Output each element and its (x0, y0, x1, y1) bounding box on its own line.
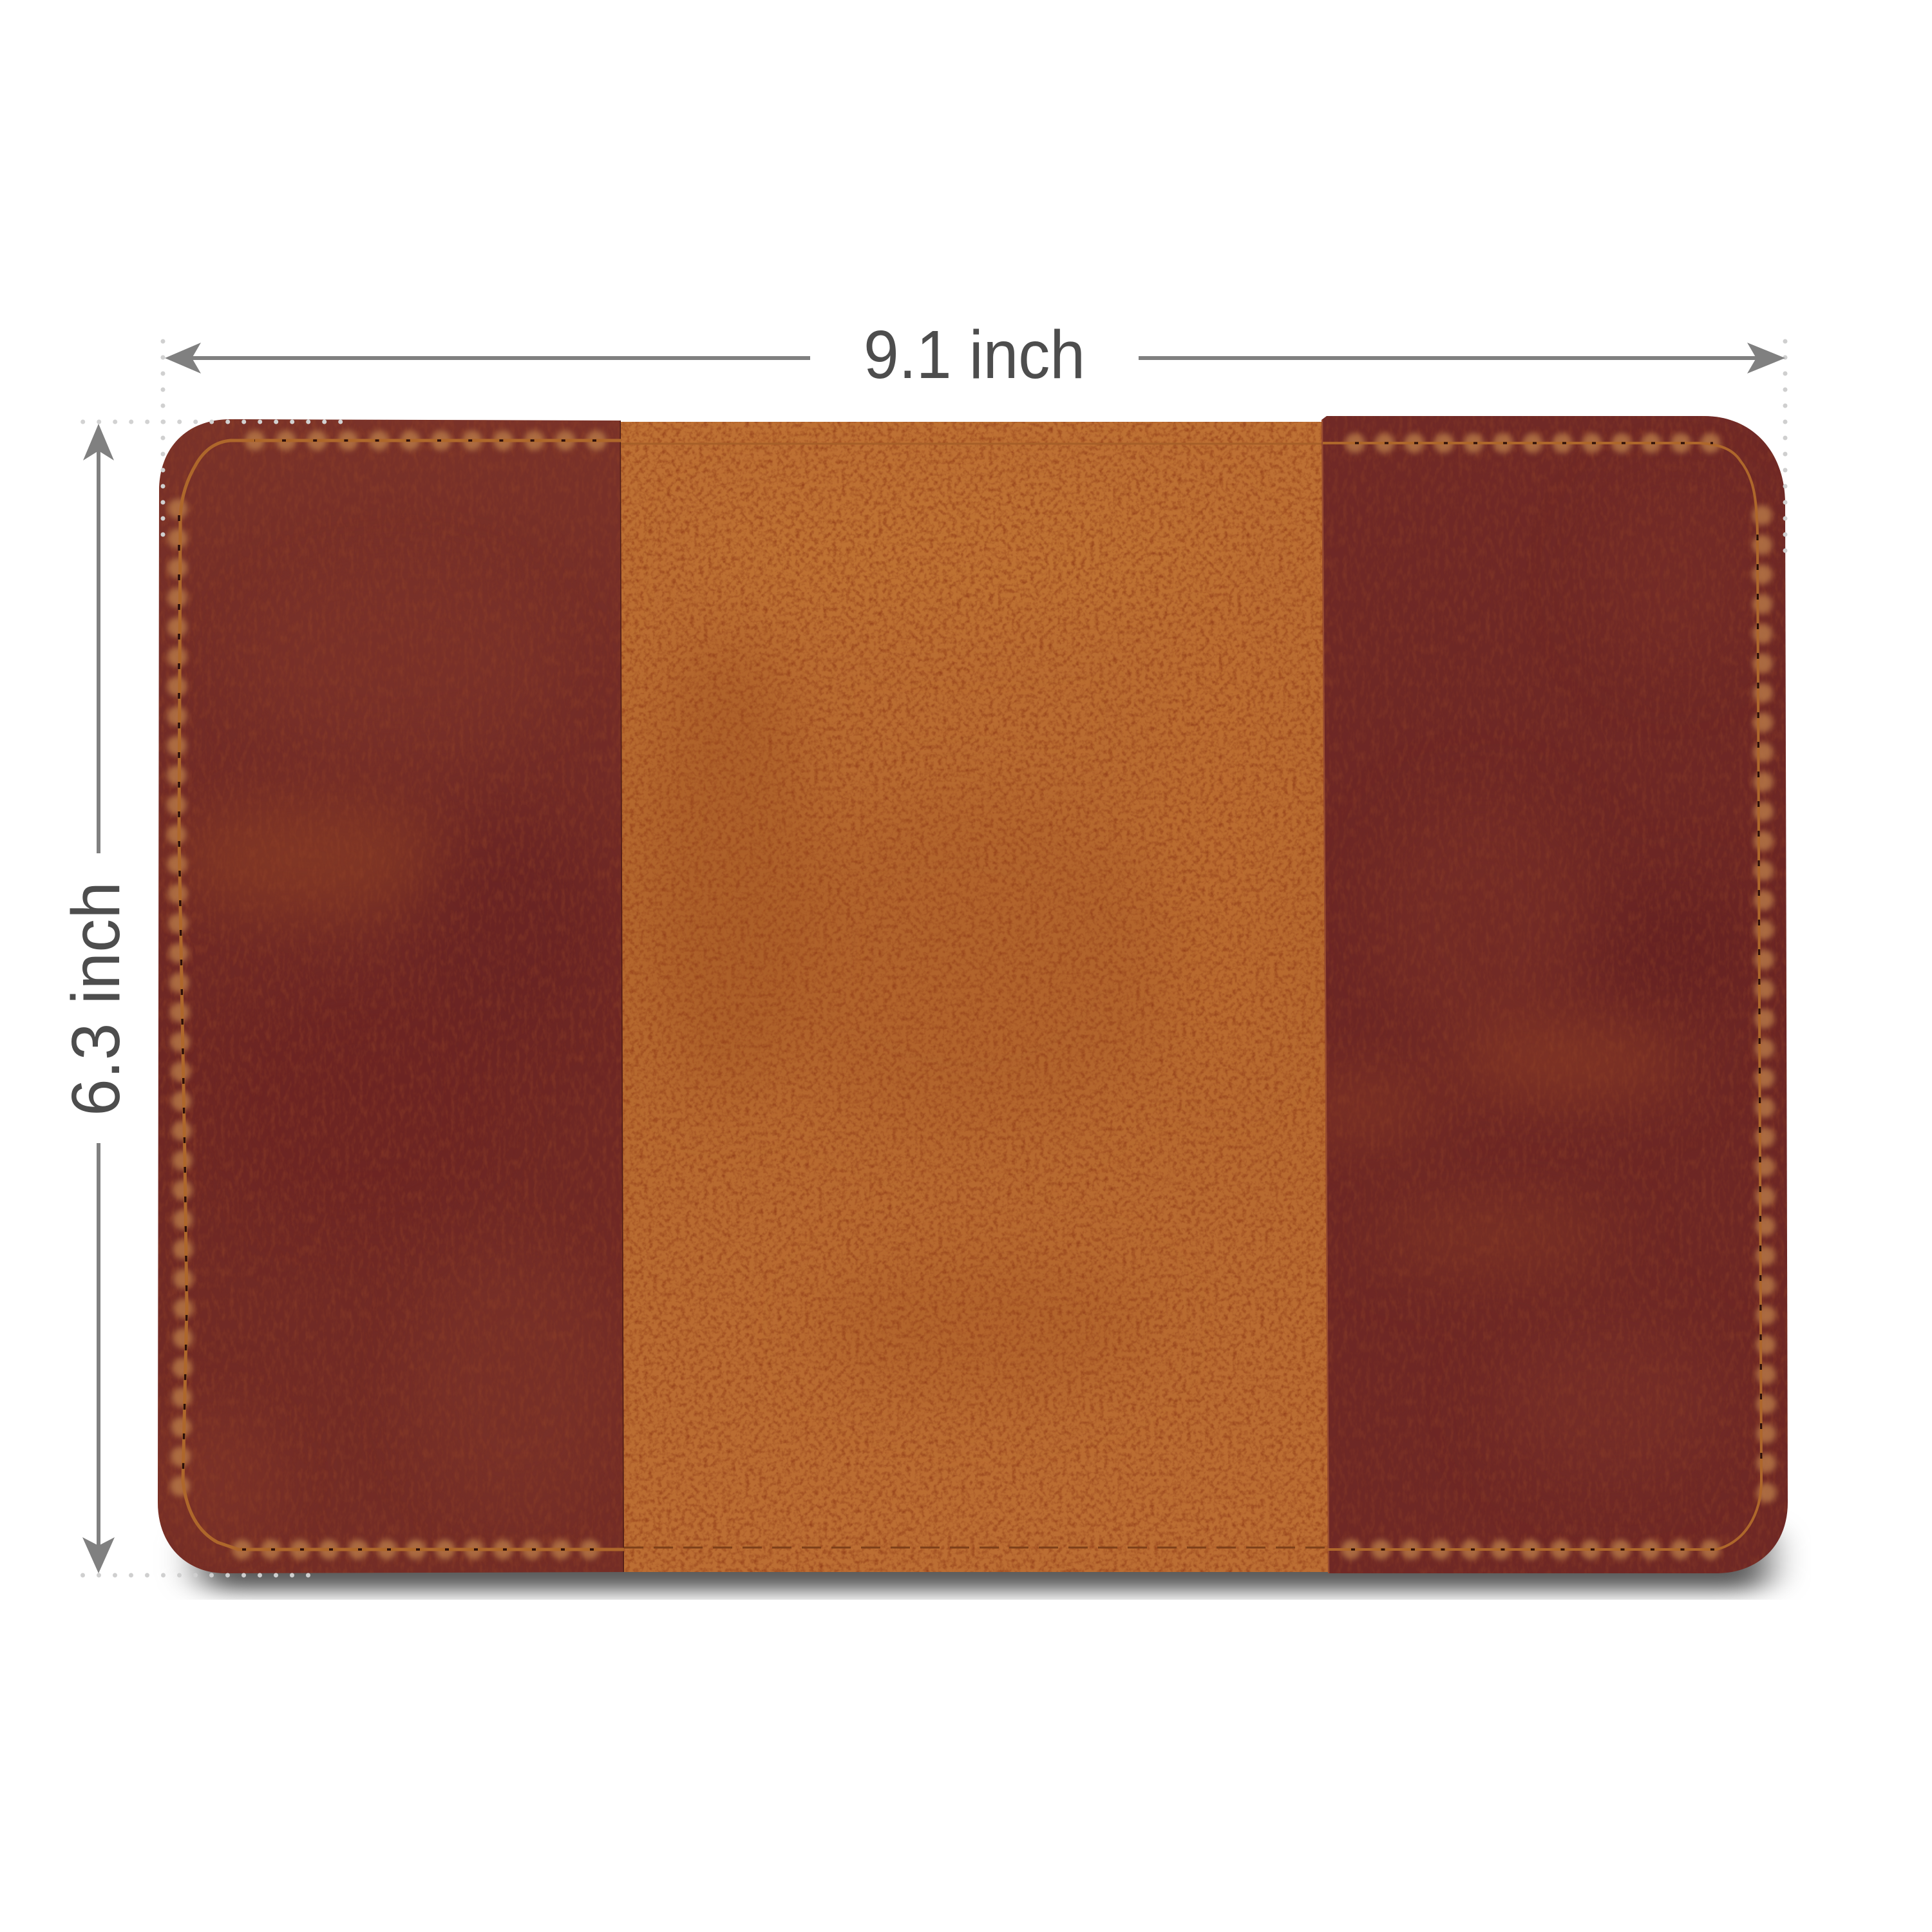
dotted guide: left vertical (161, 341, 165, 538)
left flap panel (142, 415, 628, 1578)
center panel: suede lining (612, 419, 1336, 1578)
dotted guide: top horizontal (83, 420, 341, 424)
right panel inner seam highlight (1322, 420, 1329, 1573)
height arrow: bottom segment (82, 1143, 115, 1573)
width dimension arrow (165, 317, 1785, 393)
thread: right panel (1323, 443, 1761, 1549)
center stitching top (621, 443, 1323, 444)
dotted guide: right vertical (1783, 341, 1788, 554)
open leather passport cover (142, 412, 1794, 1578)
width label: 9.1 inch (864, 317, 1085, 393)
drop shadow under wallet (200, 1526, 1768, 1591)
right flap panel (1294, 412, 1794, 1578)
needle holes: left panel (179, 440, 618, 1549)
height dimension arrow (58, 424, 134, 1573)
thread: left panel (179, 440, 624, 1549)
left panel inner seam shadow (621, 421, 624, 1572)
width arrow: left segment (165, 343, 810, 374)
height arrow: top segment (83, 424, 114, 853)
dotted guide: bottom horizontal (82, 1573, 309, 1578)
height label: 6.3 inch (58, 882, 134, 1116)
center stitching bottom (624, 1547, 1328, 1548)
needle holes: right panel (1351, 443, 1761, 1549)
stitch stains: right panel (1351, 443, 1766, 1549)
stitch stains: left panel (176, 440, 618, 1549)
width arrow: right segment (1139, 343, 1785, 374)
